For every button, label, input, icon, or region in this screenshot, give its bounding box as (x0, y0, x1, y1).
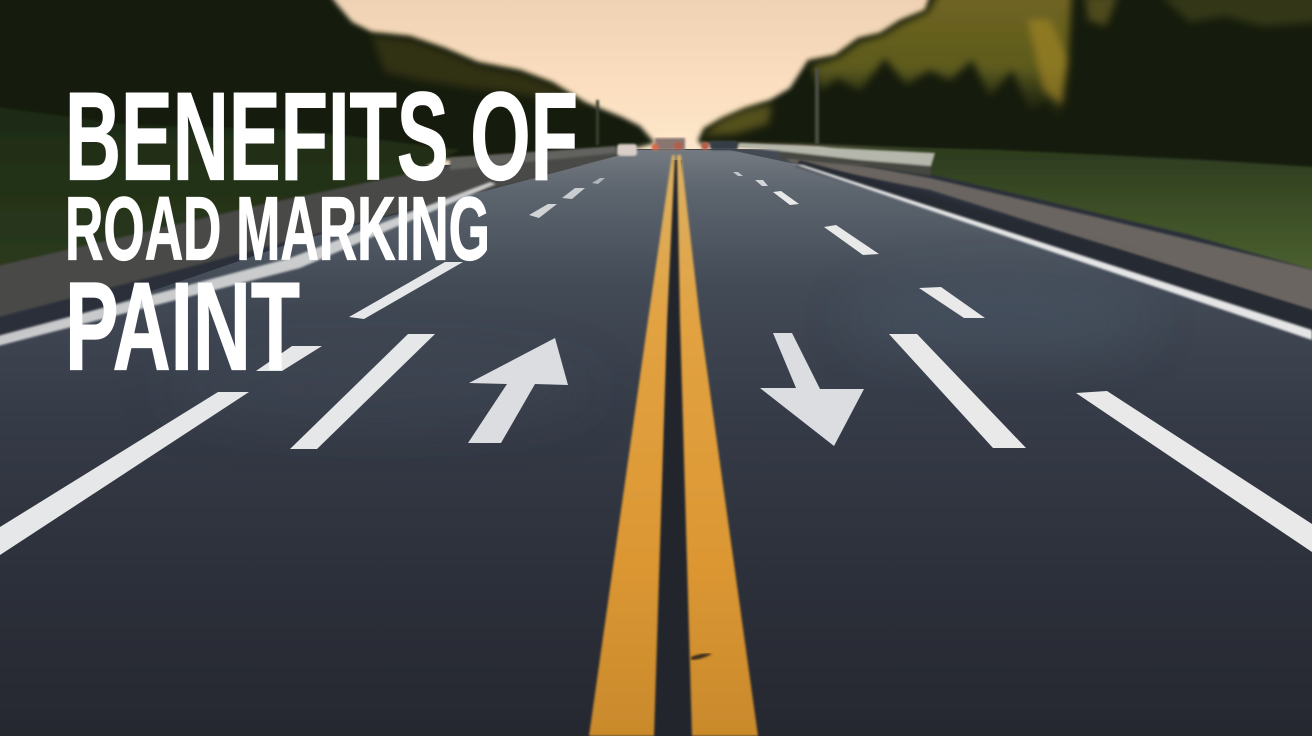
right edge line (793, 164, 1312, 340)
horizon base (620, 149, 820, 179)
title line: benefits of: BENEFITS OF (65, 68, 578, 206)
road sheen (160, 280, 1150, 430)
left guard rail (450, 146, 616, 170)
centre channel (654, 160, 692, 736)
left grass verge (0, 105, 460, 272)
right shoulder (780, 150, 1312, 316)
title line: road marking: ROAD MARKING (65, 180, 490, 280)
title line: paint: PAINT (65, 258, 300, 396)
arrow down (760, 333, 864, 446)
sky (280, 0, 1000, 165)
yellow centre line left (589, 155, 675, 736)
distant traffic (617, 138, 738, 156)
right lane dashes (733, 172, 1312, 552)
yellow centre line right (677, 155, 758, 736)
arrow up (468, 338, 568, 443)
left edge line (0, 182, 496, 348)
right dark road edge (795, 160, 1312, 338)
road surface (0, 150, 1312, 736)
right treeline (698, 0, 1312, 172)
right grass verge (820, 146, 1312, 275)
right sunlit treetops (702, 0, 1312, 136)
right guard rail (739, 143, 935, 176)
left shoulder (0, 148, 640, 322)
left sunlit treetops (372, 36, 585, 106)
title (65, 68, 578, 396)
light poles (596, 68, 819, 145)
left treeline (0, 0, 655, 160)
left lane dashes (0, 178, 605, 555)
worn paint on yellow line (691, 653, 712, 660)
